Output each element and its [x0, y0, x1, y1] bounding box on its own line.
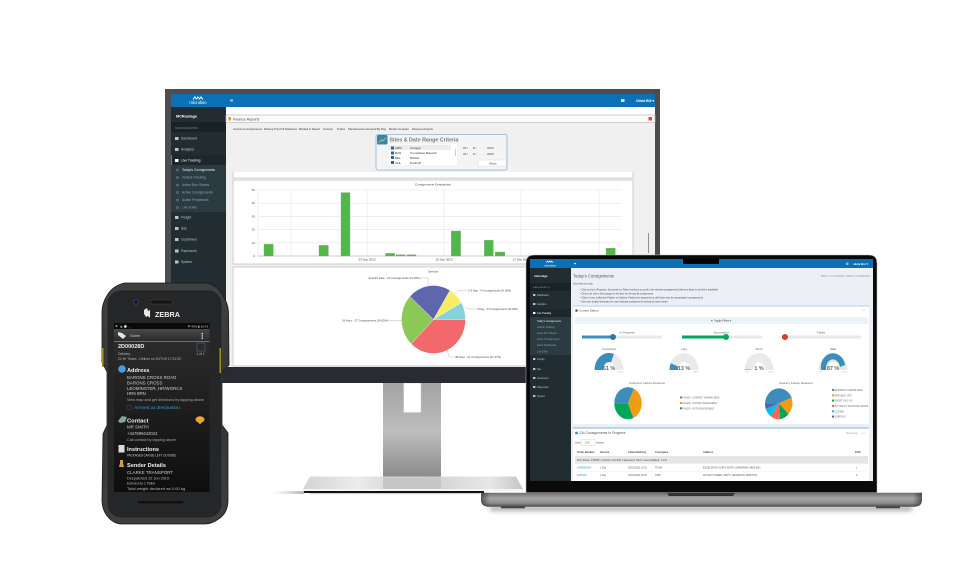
gauge: short: 0 %	[745, 372, 749, 374]
monitor sidebar: Vehicle Tracking	[182, 176, 206, 180]
sites and date range criteria box: Belfast	[410, 156, 419, 160]
sliders: Failed	[817, 330, 825, 334]
monitor sidebar: Today's Consignments	[182, 168, 215, 172]
laptop sidebar: Analytics	[537, 303, 547, 306]
phone screen	[114, 323, 210, 492]
bar chart: consignments despatched: 16 Sep 2023	[435, 258, 453, 262]
panel: consignments in progress table: Latest Delivery	[628, 450, 647, 454]
bar chart: consignments despatched: 20	[252, 228, 255, 232]
phone front glass	[107, 290, 222, 518]
sites and date range criteria box: BAN	[395, 151, 401, 155]
sites and date range criteria box: 26 /	[463, 152, 468, 156]
panel: consignments in progress table: − ×	[861, 431, 865, 435]
panel: consignments in progress table: Consignee	[655, 450, 669, 454]
laptop page heading and help text: Short help you start	[573, 282, 593, 286]
panel: consignments in progress table: 1M99928554	[577, 466, 592, 470]
gauge: short: 1 %	[754, 366, 764, 372]
pie chart: service: 5 Day - 9 Consignments (8.18%)	[477, 307, 518, 311]
bar chart: consignments despatched: 17 Sep 2023	[512, 258, 530, 262]
pie: delivery failure reasons: NO ONE TO SIGN FOR GOODS	[834, 406, 869, 408]
sites and date range criteria box: BEL	[395, 156, 401, 160]
sites and date range criteria box: Armagh	[410, 146, 421, 150]
sites and date range criteria box: Darkmill	[410, 161, 421, 165]
address section: LEOMINSTER, HR/WORCS	[127, 386, 182, 391]
address section: HR6 8RN	[127, 391, 146, 396]
monitor sidebar: Site	[181, 226, 187, 230]
gauge: late	[670, 347, 699, 374]
laptop sidebar: Freight	[537, 358, 545, 361]
phone screen: ⚑ 46% ▮ 16:43	[188, 324, 208, 328]
sender details section: Total weight declared as 0.00 kg	[127, 487, 185, 491]
laptop sidebar: System	[537, 395, 545, 398]
report tabs: Month Compare	[389, 127, 410, 131]
laptop sidebar: Active Consignments	[537, 338, 560, 341]
pie chart: service: Specific Date - 24 Consignments (21.82%)	[368, 276, 421, 280]
report tabs: Trades	[337, 127, 346, 131]
report tabs: Booked In Report	[299, 127, 320, 131]
phone screen: 24 Hr Timed - Deliver on 20/7/19 17:21:00	[118, 357, 181, 361]
report tabs: Revenue Reports	[412, 127, 434, 131]
panel: consignments in progress table: 1S8T140	[577, 474, 587, 477]
instructions section	[118, 445, 177, 458]
pie: delivery failure reasons	[765, 381, 869, 419]
pie chart: service: Service	[428, 270, 438, 274]
pie: collection failure reasons: FAILED - NOTHOOK/DOUBLE	[682, 407, 715, 410]
zebra logo	[144, 308, 181, 319]
gauge: late: 100 %	[693, 372, 699, 374]
contact section: MR SMITH	[127, 424, 149, 430]
sender details section: Sender Details	[127, 463, 166, 469]
sites and date range criteria box: Cronshaws Banwell	[410, 151, 437, 155]
laptop sidebar: Active Peripherals	[537, 344, 557, 347]
sender details section: CLARKE TRANSPORT	[127, 470, 173, 475]
address section	[118, 365, 204, 410]
laptop sidebar: Active Run Sheets	[537, 332, 557, 335]
panel: consignments in progress table: 1 Day	[600, 466, 607, 470]
panel: consignments in progress table: 22/01/2023 12:00	[628, 474, 647, 477]
panel: consignments in progress table: Show Array	[846, 432, 859, 435]
panel: consignments in progress table: Service	[600, 450, 610, 454]
laptop page heading and help text	[573, 274, 871, 304]
sites and date range criteria box: ARM	[395, 146, 402, 150]
pie: delivery failure reasons: Delivery Failure Reasons	[779, 381, 813, 385]
upper panel remainder	[233, 172, 633, 178]
laptop sidebar: Live Tracking	[537, 312, 552, 315]
laptop page heading and help text: Home > Live Tracking > Today's Consignments	[821, 274, 871, 278]
sender details section: Despatched 22 Jun 2019	[127, 476, 169, 480]
sender details section	[119, 460, 185, 491]
sites and date range criteria box: 2023	[487, 146, 494, 150]
laptop lid	[526, 255, 877, 493]
panel: consignments in progress table: Order Number	[577, 450, 595, 454]
gauge: completed	[594, 347, 624, 374]
sites and date range criteria box: Show	[489, 161, 497, 165]
phone	[102, 283, 229, 524]
panel: consignments in progress table: Run Sheet: 178025 / Vehicle: D-6 BSL / Expected: Shirt / Last Updated: 1 min	[577, 459, 668, 462]
pie chart: service	[233, 267, 633, 366]
panel: consignments in progress table: Address	[703, 450, 714, 454]
scrollbar	[647, 233, 650, 253]
pie chart: service: 48 Hour - 41 Consignments (37.27%)	[455, 355, 501, 359]
gauge: late: 0 %	[670, 372, 674, 374]
panel: consignments in progress table: 100	[585, 440, 590, 444]
contact section: +447899442024	[127, 431, 158, 436]
pie chart: service: 24 Hour - 27 Consignments (24.55%)	[342, 319, 388, 323]
gauge: completed: 0 %	[595, 372, 599, 374]
panel: consignments in progress table: 4	[856, 474, 858, 477]
panel: consignments in progress table: 1	[856, 466, 858, 470]
panel: current status	[573, 306, 869, 424]
laptop page heading and help text: • Click on the In Progress, Succeeded or Failed numbers to scroll to the relevant consignments (where a Back to top link is available)	[580, 288, 718, 292]
monitor sidebar: Paperwork	[181, 249, 197, 253]
gauge: OEE: 100 %	[842, 372, 848, 374]
bar chart: consignments despatched: Consignments Despatched	[415, 182, 451, 186]
monitor sidebar: Active Consignments	[182, 190, 213, 194]
gauge: short: Short	[755, 347, 763, 351]
finance reports bar	[226, 114, 655, 367]
gauge: late: 13 %	[678, 366, 690, 372]
monitor sidebar: Active Peripherals	[182, 198, 209, 202]
panel: current status: Current Status	[579, 308, 599, 312]
phone bottom speaker	[137, 500, 184, 504]
report tabs: Invoices	[323, 127, 334, 131]
panel: consignments in progress table: TAIS	[855, 450, 861, 454]
bar chart: consignments despatched: 10	[252, 241, 255, 245]
gauge: short: 100 %	[768, 372, 774, 374]
bar chart: consignments despatched: 23 Sep 2023	[358, 258, 376, 262]
laptop base	[481, 493, 922, 511]
monitor sidebar: Analytics	[181, 148, 195, 152]
laptop sidebar: Dashboard	[537, 294, 549, 297]
contact section: Contact	[127, 418, 149, 424]
sites and date range criteria box: GHL	[395, 161, 402, 165]
sites and date range criteria box: 2023	[487, 152, 494, 156]
pie: delivery failure reasons: REFUSED - RTS	[834, 395, 853, 397]
panel: consignments in progress table: 134 Consignments In Progress	[579, 431, 626, 435]
monitor sidebar: MAIN NAVIGATION	[175, 126, 198, 130]
laptop sidebar: Site	[537, 368, 542, 371]
bar chart: consignments despatched: 40	[252, 201, 255, 205]
panel: current status: − ×	[861, 308, 865, 312]
bar chart: consignments despatched	[233, 180, 633, 264]
laptop sidebar: Customers	[537, 377, 549, 380]
monitor sidebar: System	[181, 260, 192, 264]
laptop page heading and help text: • Click on any Collection Failure or Delivery Failure pie segments to drill down into the associated consignments	[580, 296, 704, 300]
monitor	[165, 89, 660, 494]
address section: BARONS CROSS ROAD	[127, 375, 176, 380]
monitor sidebar: Customers	[181, 238, 197, 242]
report tabs	[233, 127, 434, 131]
sliders	[582, 330, 861, 340]
panel: consignments in progress table: 1 Day	[600, 474, 607, 477]
laptop page heading and help text: • View more detailed information for each individual consignment by clicking the order number	[580, 300, 668, 304]
monitor app header	[171, 94, 655, 107]
monitor sidebar: Freight	[181, 216, 191, 220]
pie: delivery failure reasons: RECIPIENT UNAVAILABLE	[834, 389, 863, 392]
yellow side buttons	[102, 348, 221, 373]
monitor sidebar: Live Tracking	[181, 158, 201, 162]
gauge: short	[744, 347, 774, 374]
laptop page heading and help text: • Click on the Late or Short gauges to drill down into the specific consignments	[580, 292, 654, 296]
phone screen: 2D00028D	[118, 344, 144, 350]
monitor sidebar: Active Run Sheets	[182, 183, 209, 187]
phone body	[102, 283, 229, 524]
gauge: OEE	[818, 347, 848, 374]
panel: consignments in progress table: 26/01/2023 12:00	[628, 466, 647, 470]
laptop sidebar: Live ETAs	[537, 350, 549, 354]
bar chart: consignments despatched: 0	[253, 254, 255, 258]
panel: consignments in progress table: Show	[575, 440, 582, 444]
laptop sidebar: Today's Consignments	[537, 320, 562, 323]
instructions section: Instructions	[127, 447, 159, 453]
zebra logo: ZEBRA	[155, 310, 181, 319]
sites and date range criteria box: Sites & Date Range Criteria	[390, 138, 459, 144]
monitor bezel	[165, 89, 660, 383]
report tabs: Invoices & Consignments	[233, 127, 263, 131]
monitor sidebar: MCRoutage	[176, 114, 197, 118]
pie: delivery failure reasons: SURPLUS	[834, 417, 846, 419]
pie: collection failure reasons: FAILED - GOODS UNAVAILABLE	[682, 402, 717, 405]
sliders: Succeeded	[713, 330, 729, 334]
laptop sidebar: Vehicle Tracking	[537, 326, 555, 329]
report tabs: Missing Proof Of Deliveries	[264, 127, 298, 131]
laptop sidebar	[530, 268, 571, 481]
laptop	[481, 255, 922, 511]
pie: delivery failure reasons: CLOSED	[834, 411, 844, 413]
pie: collection failure reasons: FAILED - CONTACT UNAVAILABLE	[682, 396, 720, 400]
panel: consignments in progress table: 20 HIGH STREET, KEITH, GRAMPIAN, AB55 5HG	[703, 474, 757, 477]
gauge: completed: 100 %	[618, 372, 624, 374]
gauge: completed: 61 %	[603, 366, 615, 372]
phone screen: 1 of 1	[196, 352, 205, 356]
laptop sidebar: Paperwork	[537, 386, 549, 389]
address section: Address	[127, 368, 150, 374]
panel: consignments in progress table: entries	[596, 440, 604, 444]
report tabs: Site Revenue Grouped By Day	[348, 127, 387, 131]
monitor stand	[272, 383, 523, 494]
sites and date range criteria box: 8 /	[473, 152, 477, 156]
laptop app header	[530, 259, 873, 268]
sites and date range criteria box	[376, 134, 507, 170]
pie: collection failure reasons: Collection Failure Reasons	[629, 381, 665, 385]
contact section	[118, 416, 204, 442]
monitor app header: Olivia Bill ▾	[636, 99, 654, 103]
gauge: late: Late	[681, 347, 687, 351]
pie chart: service: 2-3 Day - 9 Consignments (8.18%)	[468, 289, 511, 293]
bar chart: consignments despatched: 50	[252, 188, 255, 192]
monitor sidebar	[171, 107, 226, 367]
panel: consignments in progress table: ONIX	[655, 474, 661, 477]
instructions section: PACKAGES CAN BE LEFT OUTSIDE	[127, 454, 177, 458]
sender details section: Entered as 1 Pallet	[127, 482, 155, 486]
phone screen: Delivery	[118, 352, 131, 356]
sites and date range criteria box: 8 /	[473, 146, 477, 150]
contact section: Call contact by tapping above	[127, 438, 176, 442]
monitor sidebar: Dashboard	[181, 136, 197, 140]
pie: collection failure reasons	[614, 381, 720, 419]
laptop sidebar: MAIN NAVIGATION	[533, 286, 550, 289]
bar chart: consignments despatched: 30	[252, 214, 255, 218]
laptop app header: microlise	[544, 264, 556, 268]
address section: BARONS CROSS	[127, 380, 162, 386]
phone screen: Gofer	[130, 333, 141, 338]
sites and date range criteria box: 25 /	[463, 146, 468, 150]
address section: Arrived at destination	[134, 405, 180, 410]
laptop app header: olivia Bro ▾	[853, 262, 869, 266]
gauge: completed: Completed	[602, 347, 617, 351]
monitor app header: microlise	[189, 100, 207, 105]
gauge: OEE: 87 %	[827, 366, 839, 372]
panel: consignments in progress table: EXCELSIOR COURT, KEITH, GRAMPIAN, AB55 5SG	[703, 466, 761, 470]
finance reports bar: Finance Reports	[233, 118, 260, 122]
gauge: OEE: 0 %	[819, 372, 823, 374]
camera and speaker	[134, 300, 173, 304]
phone screen: ◉ ⌚ ...	[120, 324, 131, 328]
panel: consignments in progress table	[573, 428, 869, 481]
panel: consignments in progress table: TKGM	[655, 466, 662, 470]
laptop sidebar: microdge	[534, 274, 548, 278]
gauge: OEE: OEE	[830, 347, 836, 351]
monitor sidebar: Live ETAs	[182, 206, 197, 210]
sliders: In Progress	[619, 330, 635, 334]
pie: delivery failure reasons: SHORT ON 1-2-3	[834, 401, 853, 403]
panel: current status: ▼ Toggle Filters ▾	[711, 318, 732, 322]
address section: View map and get directions by tapping above	[127, 398, 204, 402]
laptop page heading and help text: Today's Consignments	[573, 274, 615, 280]
